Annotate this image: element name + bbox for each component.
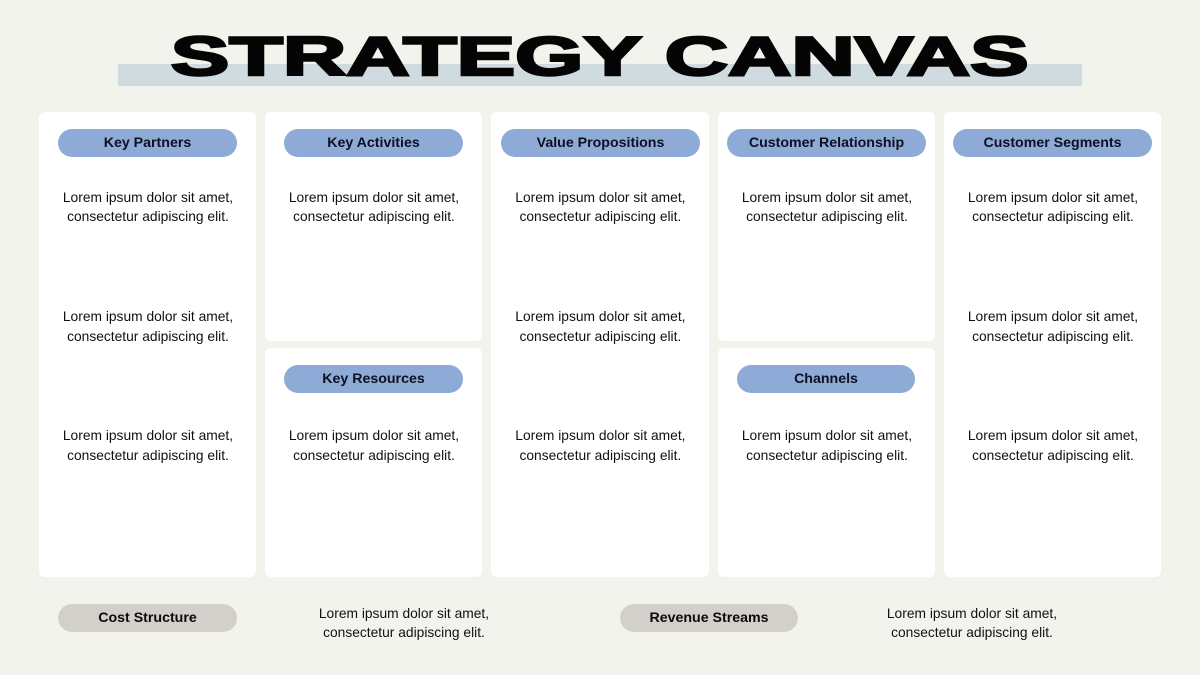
text: key partners 2: consectetur adipiscing elit.	[67, 329, 229, 344]
panel: customer segments	[944, 112, 1161, 577]
heading: value propositions: Value Propositions	[537, 135, 664, 151]
text: value propositions 3: Lorem ipsum dolor sit amet,	[515, 428, 686, 443]
panel: customer relationship	[718, 112, 935, 341]
panel: channels	[718, 348, 935, 577]
text: customer segments 2	[968, 309, 1138, 344]
heading: key partners	[58, 129, 237, 157]
text: key partners 2	[63, 309, 233, 344]
text: cost structure: consectetur adipiscing elit.	[323, 625, 485, 640]
text: customer segments 2: Lorem ipsum dolor sit amet,	[968, 309, 1138, 324]
text: value propositions 3	[515, 428, 686, 463]
text: customer segments 1: consectetur adipiscing elit.	[972, 209, 1134, 224]
text: key resources: consectetur adipiscing elit.	[293, 448, 455, 463]
heading: revenue streams	[620, 604, 798, 632]
text: key partners 3	[63, 428, 233, 463]
text: key partners 3: consectetur adipiscing elit.	[67, 448, 229, 463]
text: customer segments 2: consectetur adipiscing elit.	[972, 329, 1134, 344]
text: channels	[742, 428, 912, 463]
text: value propositions 2: Lorem ipsum dolor sit amet,	[515, 309, 686, 324]
text: key activities: Lorem ipsum dolor sit amet,	[289, 190, 459, 205]
heading: customer segments: Customer Segments	[984, 135, 1121, 151]
text: key resources: Lorem ipsum dolor sit amet,	[289, 428, 459, 443]
panel: value propositions	[491, 112, 709, 577]
text: value propositions 2: consectetur adipiscing elit.	[519, 329, 681, 344]
text: customer segments 1	[968, 190, 1138, 224]
heading: key activities	[284, 129, 463, 157]
title: STRATEGY CANVAS	[171, 25, 1029, 87]
text: customer relationship: consectetur adipiscing elit.	[746, 209, 908, 224]
text: revenue streams: Lorem ipsum dolor sit amet,	[887, 606, 1057, 621]
text: customer segments 3: consectetur adipiscing elit.	[972, 448, 1134, 463]
heading: channels	[737, 365, 915, 393]
text: value propositions 1: Lorem ipsum dolor sit amet,	[515, 190, 686, 205]
text: cost structure	[319, 606, 489, 640]
panel: key partners	[39, 112, 256, 577]
text: customer relationship	[742, 190, 912, 224]
text: customer relationship: Lorem ipsum dolor sit amet,	[742, 190, 912, 205]
text: channels: Lorem ipsum dolor sit amet,	[742, 428, 912, 443]
text: customer segments 1: Lorem ipsum dolor sit amet,	[968, 190, 1138, 205]
title band	[118, 64, 1082, 86]
heading: key partners: Key Partners	[104, 135, 191, 151]
text: key partners 2: Lorem ipsum dolor sit amet,	[63, 309, 233, 324]
text: key resources	[289, 428, 459, 463]
text: customer segments 3: Lorem ipsum dolor sit amet,	[968, 428, 1138, 443]
text: value propositions 1: consectetur adipiscing elit.	[519, 209, 681, 224]
text: key partners 1: Lorem ipsum dolor sit amet,	[63, 190, 233, 205]
heading: channels: Channels	[794, 371, 858, 387]
heading: cost structure: Cost Structure	[98, 610, 197, 626]
heading: customer segments	[953, 129, 1152, 157]
heading: customer relationship	[727, 129, 926, 157]
text: channels: consectetur adipiscing elit.	[746, 448, 908, 463]
panel: key resources	[265, 348, 482, 577]
heading: key activities: Key Activities	[327, 135, 420, 151]
text: value propositions 2	[515, 309, 686, 344]
heading: revenue streams: Revenue Streams	[649, 610, 769, 626]
text: revenue streams: consectetur adipiscing elit.	[891, 625, 1053, 640]
heading: customer relationship: Customer Relationship	[749, 135, 904, 151]
text: revenue streams	[887, 606, 1057, 640]
heading: key resources	[284, 365, 463, 393]
heading: key resources: Key Resources	[322, 371, 425, 387]
heading: value propositions	[501, 129, 700, 157]
text: key partners 1	[63, 190, 233, 224]
heading: cost structure	[58, 604, 237, 632]
text: cost structure: Lorem ipsum dolor sit amet,	[319, 606, 489, 621]
text: key activities	[289, 190, 459, 224]
panel: key activities	[265, 112, 482, 341]
text: value propositions 3: consectetur adipiscing elit.	[519, 448, 681, 463]
text: key partners 3: Lorem ipsum dolor sit amet,	[63, 428, 233, 443]
text: value propositions 1	[515, 190, 686, 224]
text: key partners 1: consectetur adipiscing elit.	[67, 209, 229, 224]
text: key activities: consectetur adipiscing elit.	[293, 209, 455, 224]
text: customer segments 3	[968, 428, 1138, 463]
